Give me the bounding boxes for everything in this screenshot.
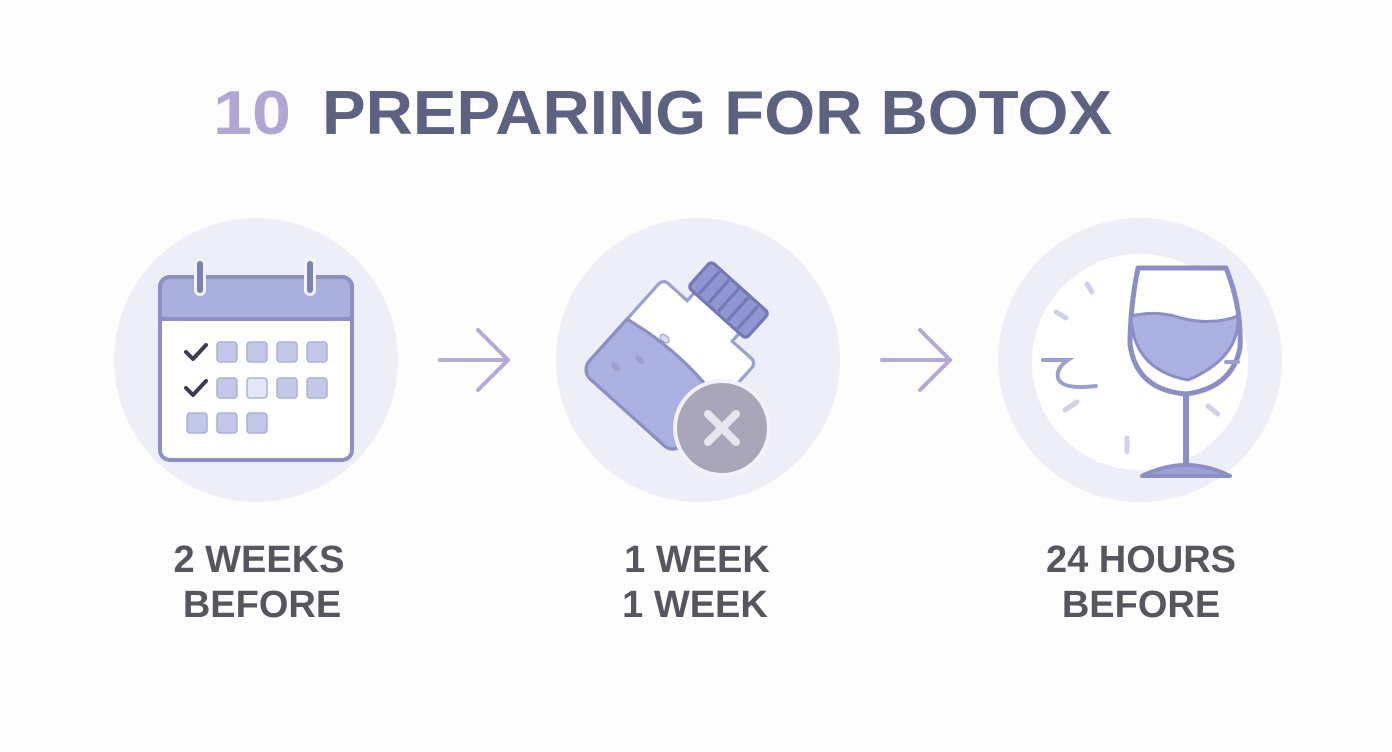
icon: calendar [160,264,352,460]
label: 1 week: 1 WEEK [622,584,768,626]
icon: x badge [675,381,769,475]
label: 24 hours before: BEFORE [1062,584,1220,626]
arrow 1 [440,330,508,390]
title: 10 [213,79,291,148]
label: 24 hours before: 24 HOURS [1046,539,1236,581]
label: 1 week [622,539,770,626]
icon: clock ticks [1056,284,1218,452]
panel: 2 weeks before [114,218,398,502]
label: 1 week: 1 WEEK [624,539,770,581]
label: 2 weeks before [173,539,345,626]
panel: 1 week [556,218,840,502]
icon: wine glass [1130,268,1240,476]
label: 2 weeks before: 2 WEEKS [173,539,345,581]
arrow 2 [882,330,950,390]
panel: 24 hours before [998,218,1282,502]
label: 24 hours before [1046,539,1236,626]
icon: bottle [581,245,787,454]
title: PREPARING FOR BOTOX [322,79,1112,148]
label: 2 weeks before: BEFORE [183,584,341,626]
